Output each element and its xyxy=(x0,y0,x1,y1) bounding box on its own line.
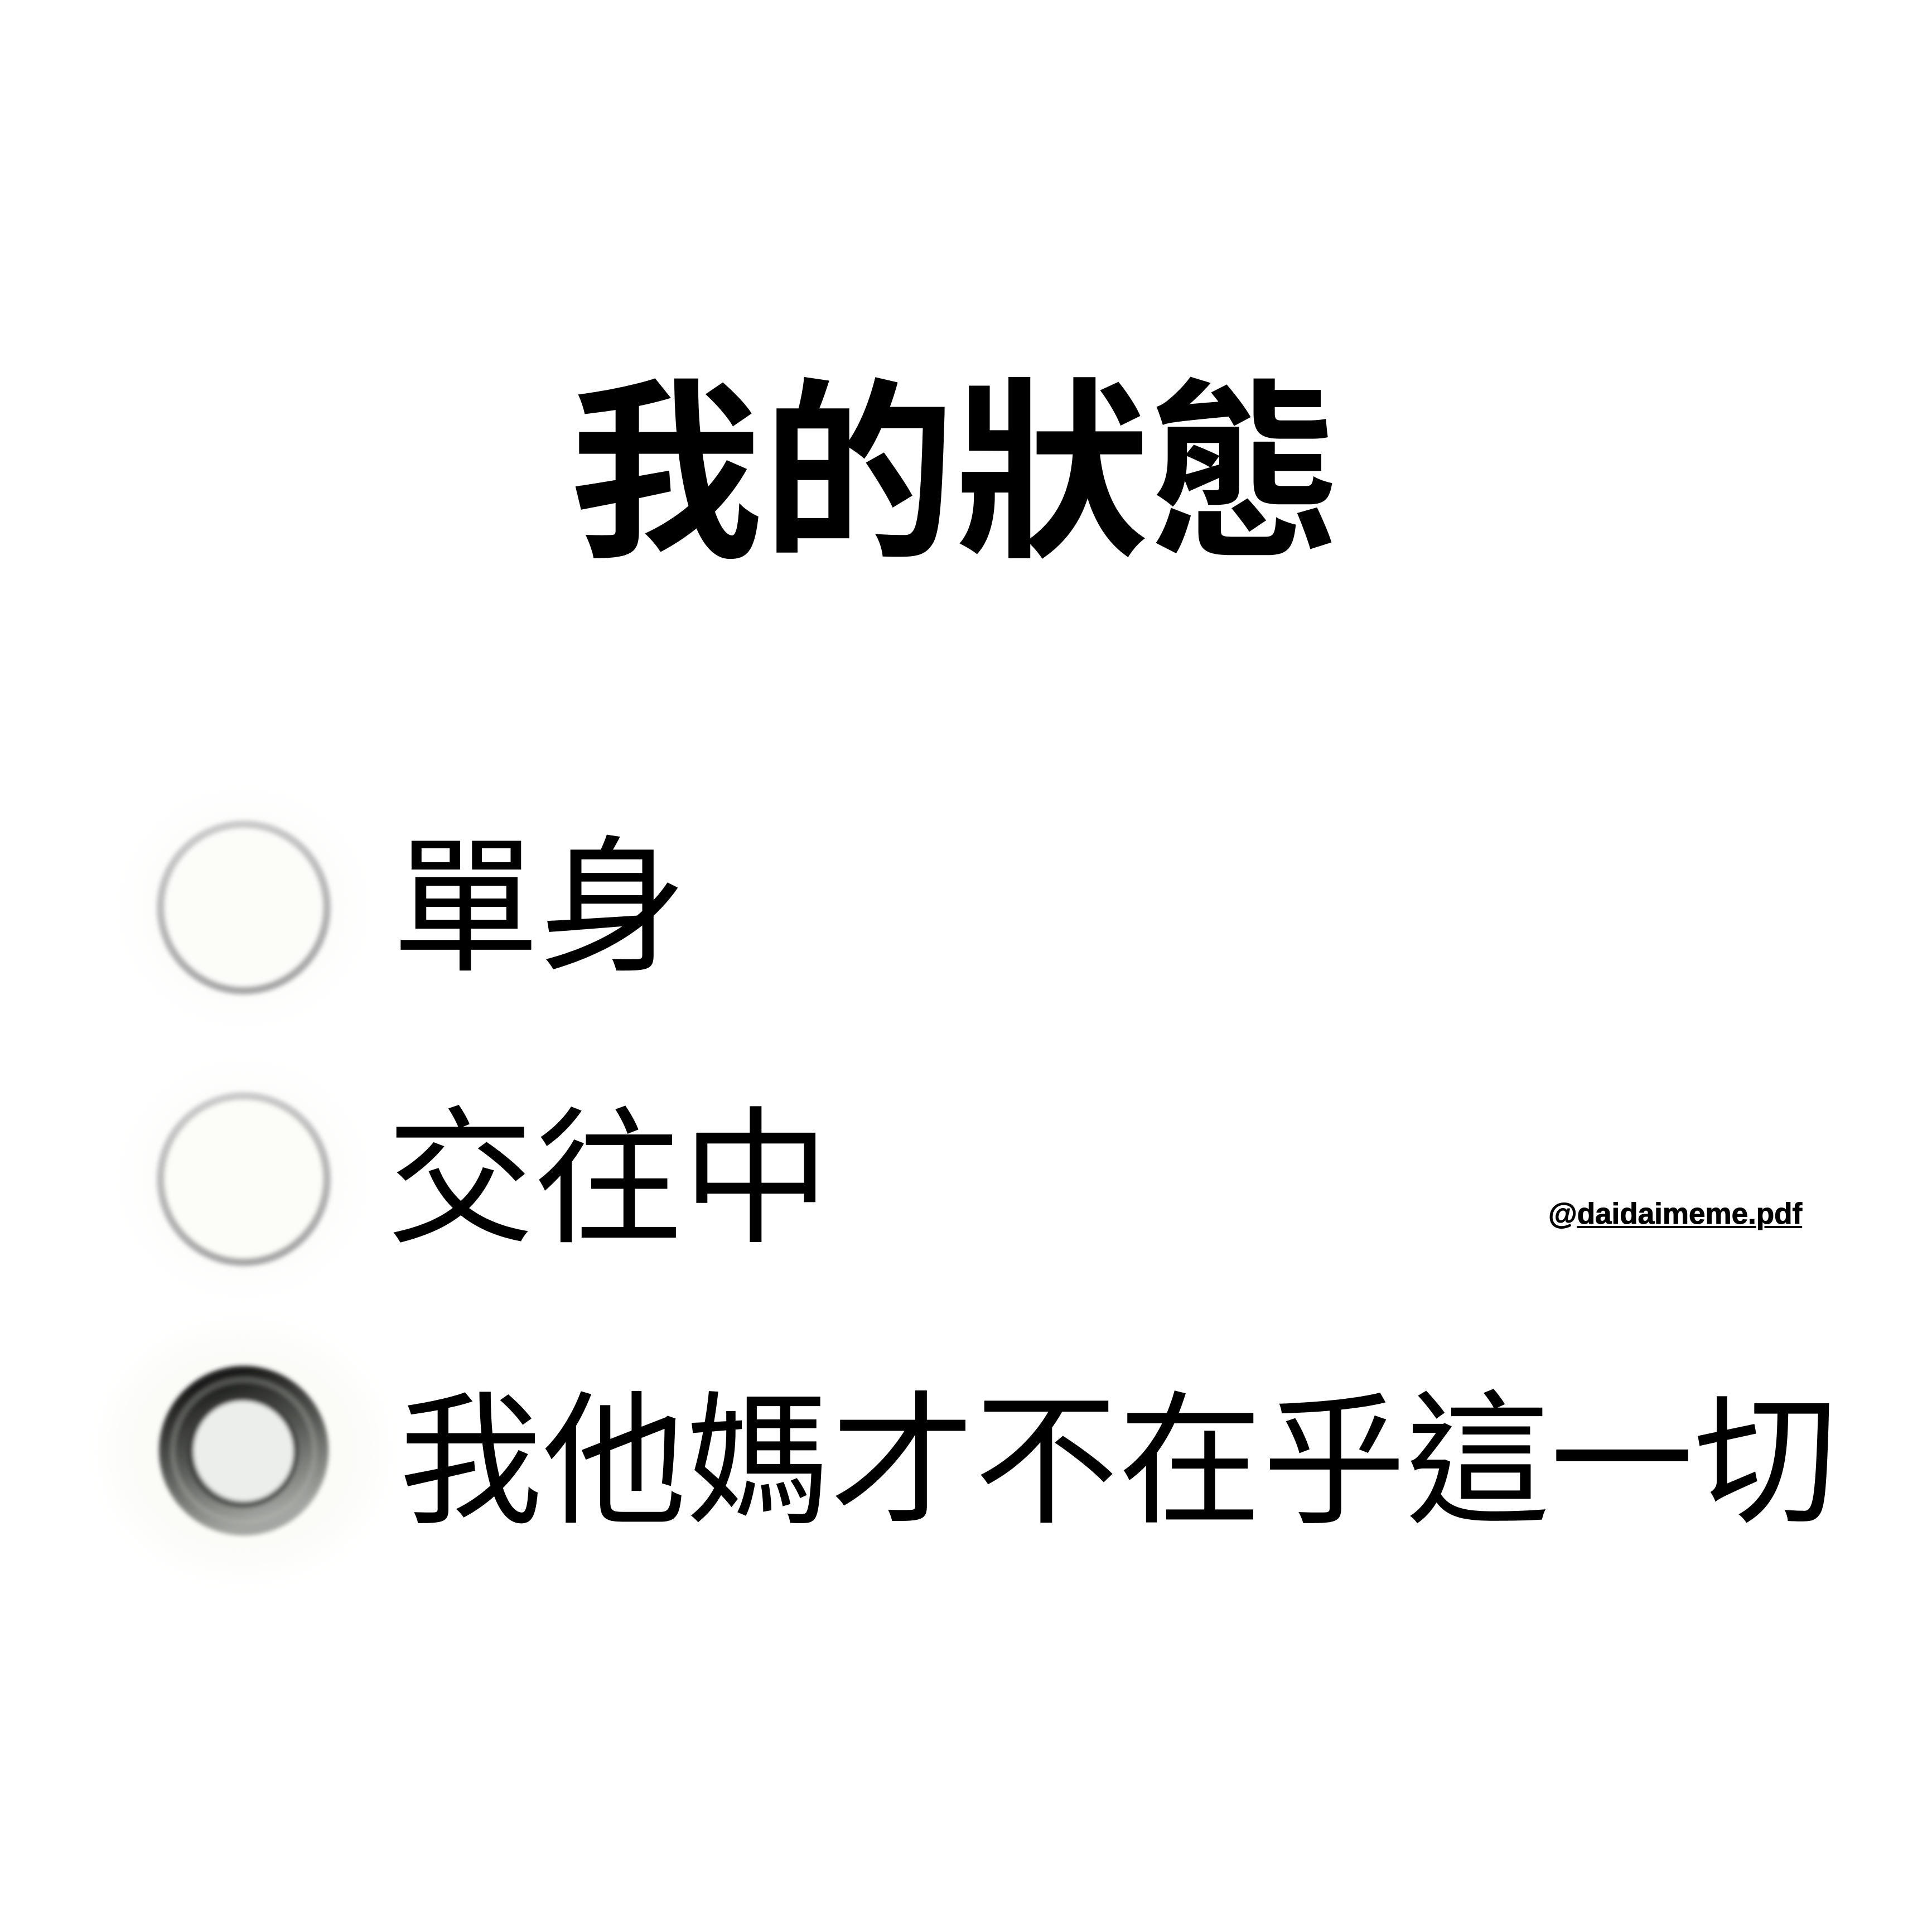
option: single: 單身 xyxy=(392,789,687,1002)
radio: in a relationship, unselected xyxy=(129,1070,358,1288)
radio: don't care, selected xyxy=(110,1331,378,1571)
option: I don't care: 我他媽才不在乎這一切 xyxy=(399,1345,1838,1553)
radio: single, unselected xyxy=(129,799,358,1016)
option: in a relationship: 交往中 xyxy=(387,1060,830,1273)
title: 我的狀態 xyxy=(569,317,1341,597)
watermark: @daidaimeme.pdf xyxy=(1548,1197,1802,1230)
